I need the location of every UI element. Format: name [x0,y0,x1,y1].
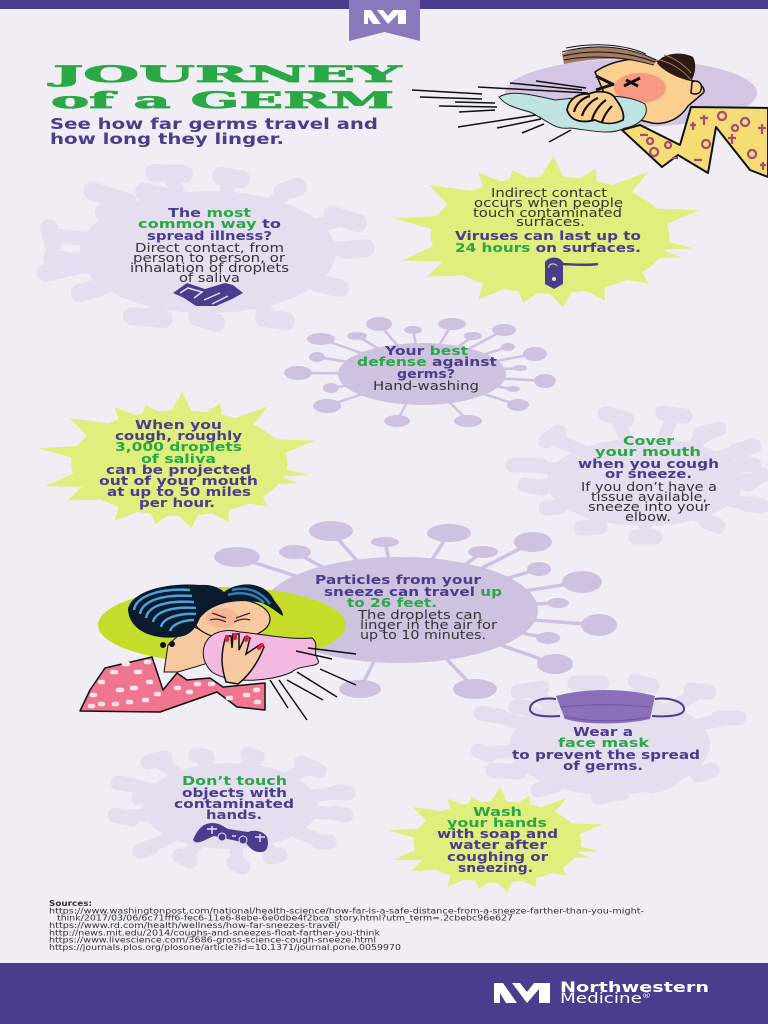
icon: handshake [173,283,243,306]
text: face mask [512,724,700,773]
ribbon logo [349,0,420,41]
text: wash hands: your hands [447,815,547,830]
title: of a GERM [51,88,394,114]
text: contaminated hands: hands. [206,807,262,822]
text: wash hands: water after [449,837,548,852]
virus: best defense [284,317,556,427]
text: cover mouth: when you cough [578,456,719,471]
sources: https://www.washingtonpost.com/national/health-science/how-far-is-a-safe-distance-from-a-sneeze-farther-than-you-might- [49,906,644,916]
text: cover mouth [578,433,719,524]
text: cough [99,417,258,510]
text: common way: inhalation of droplets [130,261,289,275]
text: face mask: Wear a [573,724,633,739]
text: particles: to 26 feet. [347,595,437,610]
text: indirect contact: touch contaminated [473,206,622,220]
text: common way: of saliva [179,271,240,285]
virus: face mask [478,681,739,797]
sources [49,899,644,952]
sources: Sources: [49,899,92,908]
text: wash hands [437,804,558,875]
footer logo: Northwestern [560,980,709,996]
text: indirect contact [455,186,641,255]
text: best defense [357,343,497,393]
text: cough: can be projected [106,462,251,477]
icon: door handle [545,258,598,289]
text: contaminated hands: objects with [182,785,287,800]
text: best defense: germs? [397,366,455,381]
text: cough: When you [135,417,222,432]
text: particles: sneeze can travel up [324,584,502,599]
text: indirect contact: occurs when people [474,196,623,210]
text: cover mouth: sneeze into your [588,500,710,514]
virus: common way [46,173,366,323]
text: wash hands: sneezing. [458,860,533,875]
text: indirect contact: Indirect contact [491,186,607,200]
text: contaminated hands [174,773,294,822]
text: cover mouth: or sneeze. [605,466,692,481]
subtitle: how long they linger. [50,130,284,148]
sources: https://www.rd.com/health/wellness/how-far-sneezes-travel/ [49,921,341,930]
text: best defense: Your best [384,343,468,358]
text: cover mouth: If you don’t have a [581,480,717,494]
subtitle: See how far germs travel and [50,115,378,133]
sources: https://www.livescience.com/3686-gross-science-cough-sneeze.html [49,936,376,944]
footer band [0,963,768,1024]
text: contaminated hands: contaminated [174,796,294,811]
text: wash hands: coughing or [447,849,549,864]
text: common way: The most [168,205,251,220]
virus: particles [214,521,617,699]
star: indirect contact [394,156,700,307]
text: cough: cough, roughly [115,428,242,443]
icon: game controller [193,823,268,852]
sources: http://news.mit.edu/2014/coughs-and-sneezes-float-farther-you-think [49,928,381,938]
text: contaminated hands: Don’t touch [182,773,287,788]
text: face mask: of germs. [563,758,643,773]
subtitle [50,115,378,148]
text: cough: per hour. [139,495,215,510]
text: common way [130,205,289,285]
text: wash hands: Wash [473,804,522,819]
star: cough [38,392,315,528]
icon: face mask [530,690,684,724]
text: face mask: to prevent the spread [512,747,700,762]
title: JOURNEY [47,62,404,88]
text: indirect contact: Viruses can last up to [455,228,641,243]
illustration: sneezing woman [80,584,356,720]
text: particles [315,572,502,642]
text: cough: of saliva [141,451,216,466]
text: cover mouth: your mouth [595,444,701,459]
text: indirect contact: surfaces. [516,215,585,229]
text: indirect contact: 24 hours on surfaces. [455,240,641,255]
title [47,62,404,114]
star: wash hands [388,787,603,892]
footer logo: ® [642,992,651,1000]
text: cover mouth: elbow. [625,510,671,524]
text: particles: The droplets can [357,608,482,622]
text: cough: out of your mouth [99,473,258,488]
illustration: sneezing man [412,45,768,177]
text: particles: linger in the air for [360,618,497,632]
text: wash hands: with soap and [437,826,558,841]
text: cough: at up to 50 miles [107,484,251,499]
footer logo [494,980,709,1007]
text: face mask: face mask [558,735,650,750]
text: best defense: defense against [357,354,497,369]
top bar [0,0,768,9]
sources: think/2017/03/06/6c71fff6-fec6-11e6-8ebe-6e0dbe4f2bca_story.html?utm_term=.2cbebc96e627 [57,914,513,922]
footer logo: Medicine [560,991,623,1007]
text: cover mouth: tissue available, [591,490,707,504]
text: cough: 3,000 droplets [115,439,242,454]
text: best defense: Hand-washing [373,379,479,393]
text: common way: person to person, or [133,251,285,265]
text: common way: Direct contact, from [135,241,284,255]
sources: https://journals.plos.org/plosone/article?id=10.1371/journal.pone.0059970 [49,943,401,952]
virus: cover mouth [513,413,762,537]
virus: contaminated hands [115,754,348,867]
text: particles: up to 10 minutes. [360,628,486,642]
text: common way: spread illness? [147,228,272,243]
text: cover mouth: Cover [623,433,675,448]
text: common way: common way to [138,216,282,231]
text: particles: Particles from your [315,572,482,587]
